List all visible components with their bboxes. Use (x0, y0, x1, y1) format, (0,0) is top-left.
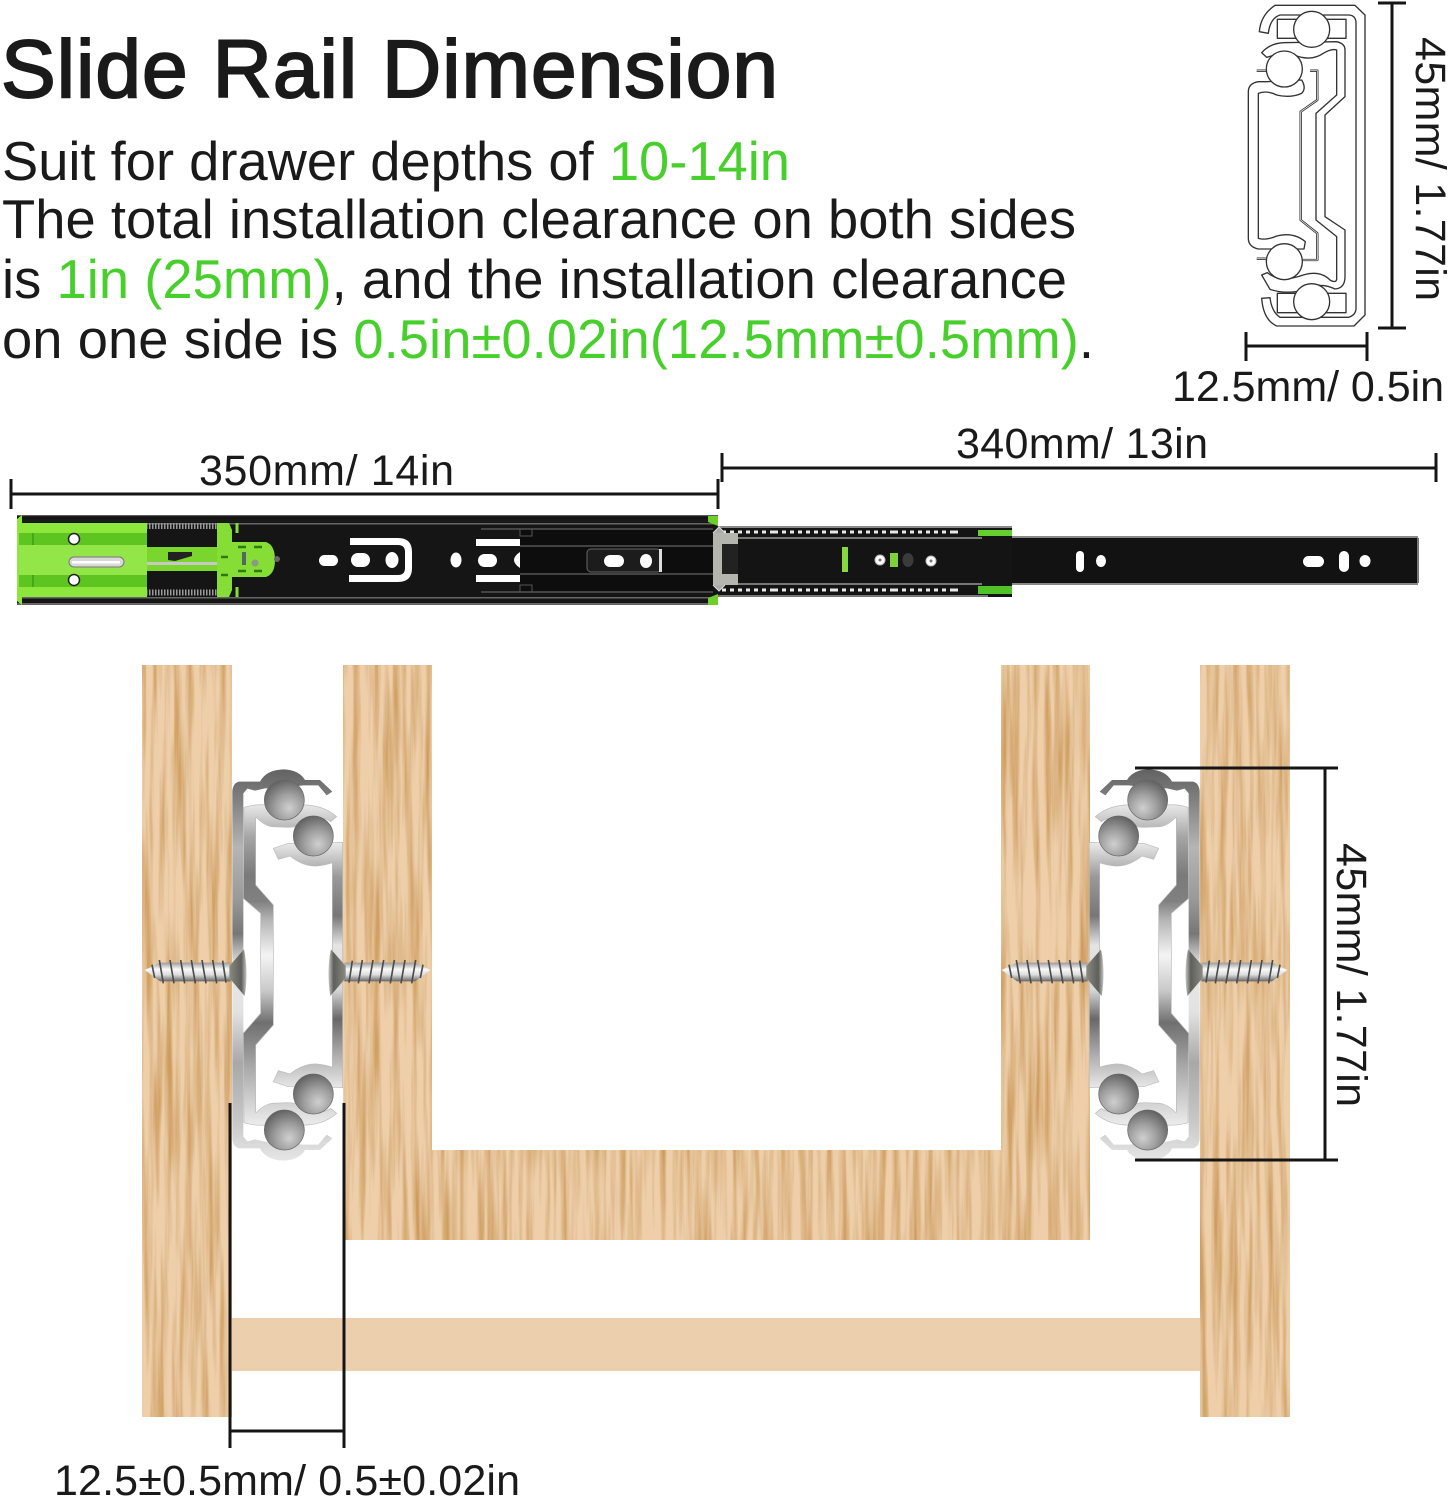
rail cross-section line drawing (1248, 5, 1365, 326)
width dimension: top right (1172, 332, 1444, 411)
height dimension: right rail: 45mm/ 1.77in (1327, 843, 1375, 1107)
description text: The total installation clearance on both sides (2, 189, 1076, 250)
extension length dimension: 340mm/ 13in (956, 420, 1208, 468)
inner slide plate (481, 529, 713, 592)
mounting holes (319, 538, 520, 582)
slider clip (713, 527, 738, 591)
clearance dimension: left rail (54, 1103, 520, 1500)
green bracket (217, 523, 280, 597)
description text: is 1in (25mm), and the installation clearance (2, 249, 1067, 310)
green slider bar (147, 547, 218, 571)
rail: outer member (17, 515, 738, 605)
rail: extension member (980, 536, 1419, 585)
slide rail product photo (17, 515, 1419, 605)
wood drawer and cabinet panels (142, 665, 1290, 1417)
springs (146, 526, 217, 592)
width dimension: top right: 12.5mm/ 0.5in (1172, 363, 1444, 411)
description text (2, 131, 1094, 370)
green end cap (17, 515, 147, 605)
title: Slide Rail Dimension (1, 24, 778, 115)
left slide rail with screws (145, 769, 430, 1161)
rail: intermediate member (713, 526, 1012, 597)
height dimension: right rail (1135, 768, 1375, 1160)
closed length dimension: 350mm/ 14in (199, 447, 454, 495)
description text: on one side is 0.5in±0.02in(12.5mm±0.5mm). (2, 309, 1094, 370)
extension length dimension (722, 420, 1436, 482)
description text: Suit for drawer depths of 10-14in (2, 131, 790, 192)
closed length dimension (11, 447, 718, 509)
right slide rail with screws (1002, 769, 1287, 1161)
height dimension: top right (1378, 3, 1452, 328)
drawer bottom board (232, 1318, 1200, 1371)
